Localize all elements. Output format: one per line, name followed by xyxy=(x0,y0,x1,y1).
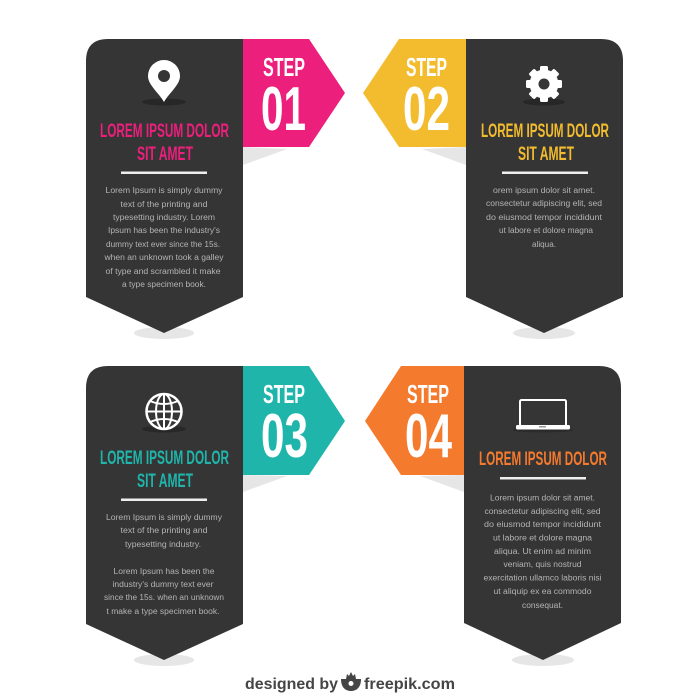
body text 4: Lorem ipsum dolor sit amet. xyxy=(490,494,595,502)
divider 2 xyxy=(502,172,588,174)
body text 1: dummy text ever since the 15s. xyxy=(106,240,220,249)
heading 1 xyxy=(100,121,229,165)
body text 4 xyxy=(484,494,602,610)
body text 4: aliqua. Ut enim ad minim xyxy=(494,547,591,556)
step label 1: STEP xyxy=(263,52,305,82)
body text 3: typesetting industry. xyxy=(125,540,201,549)
icon: laptop xyxy=(513,400,573,432)
body text 4: ut labore et dolore magna xyxy=(493,534,593,542)
tab shadow 2 xyxy=(422,147,466,165)
body text 1: a type specimen book. xyxy=(122,280,206,289)
tab shadow 3 xyxy=(243,475,287,492)
yellow arrow tab xyxy=(363,39,466,147)
body text 1: typesetting industry. Lorem xyxy=(113,213,215,222)
body text 1: text of the printing and xyxy=(120,200,208,209)
heading 1: SIT AMET xyxy=(137,144,193,165)
footer credit xyxy=(245,672,455,693)
heading 2: LOREM IPSUM DOLOR xyxy=(481,121,609,142)
divider 3 xyxy=(121,498,207,501)
step number 01: 01 xyxy=(261,75,306,144)
floor shadow under panel 3 xyxy=(134,654,194,666)
footer credit: designed by xyxy=(245,676,338,693)
body text 4: ut aliquip ex ea commodo xyxy=(494,587,592,596)
divider 1 xyxy=(121,172,207,174)
tab shadow 1 xyxy=(243,147,287,165)
teal arrow tab xyxy=(243,366,345,475)
heading 3: SIT AMET xyxy=(137,471,193,492)
step label 3: STEP xyxy=(263,379,305,409)
body text 2: do eiusmod tempor incididunt xyxy=(486,213,603,222)
heading 2: SIT AMET xyxy=(518,144,574,165)
body text 4: do eiusmod tempor incididunt xyxy=(484,520,602,529)
heading 1: LOREM IPSUM DOLOR xyxy=(100,121,229,142)
step number 04: 04 xyxy=(405,402,452,471)
body text 3: Lorem Ipsum is simply dummy xyxy=(106,513,222,522)
panel: step 01 xyxy=(86,39,345,339)
body text 3: since the 15s. when an unknown xyxy=(104,593,224,602)
body text 4: veniam, quis nostrud xyxy=(504,560,582,569)
icon: freepik logo xyxy=(341,672,361,691)
heading 3 xyxy=(100,448,229,492)
heading 2 xyxy=(481,121,609,165)
body text 1: of type and scrambled it make xyxy=(106,267,221,276)
body text 2: ut labore et dolore magna xyxy=(499,226,594,235)
floor shadow under panel 2 xyxy=(513,327,575,339)
body text 3: t make a type specimen book. xyxy=(106,607,220,616)
divider 4 xyxy=(500,477,586,480)
dark card 3 xyxy=(86,366,243,660)
dark card 2 xyxy=(466,39,623,333)
body text 2: consectetur adipiscing elit, sed xyxy=(486,199,602,208)
orange arrow tab xyxy=(365,366,464,475)
step label 2: STEP xyxy=(406,52,447,82)
step number 02: 02 xyxy=(403,75,450,144)
body text 2: aliqua. xyxy=(532,240,556,249)
icon: location pin xyxy=(142,60,186,106)
pink arrow tab xyxy=(243,39,345,147)
body text 2: orem ipsum dolor sit amet. xyxy=(493,186,595,195)
dark card 1 xyxy=(86,39,243,333)
body text 4: consequat. xyxy=(522,601,563,610)
panel: step 02 xyxy=(363,39,623,339)
floor shadow under panel 1 xyxy=(134,327,194,339)
body text 3 xyxy=(104,513,224,616)
panel: step 04 xyxy=(365,366,621,666)
step number 03: 03 xyxy=(261,402,308,471)
heading 3: LOREM IPSUM DOLOR xyxy=(100,448,229,469)
body text 3: industry's dummy text ever xyxy=(112,580,214,589)
tab shadow 4 xyxy=(420,475,464,492)
heading 4: LOREM IPSUM DOLOR xyxy=(479,449,607,470)
body text 3: text of the printing and xyxy=(120,526,208,535)
body text 4: exercitation ullamco laboris nisi xyxy=(484,574,602,582)
body text 1: Ipsum has been the industry's xyxy=(108,226,220,235)
icon: globe xyxy=(142,394,186,432)
dark card 4 xyxy=(464,366,621,660)
body text 1: Lorem Ipsum is simply dummy xyxy=(106,186,222,195)
icon: gear xyxy=(523,66,565,106)
step label 4: STEP xyxy=(407,379,449,409)
body text 4: consectetur adipiscing elit, sed xyxy=(484,507,600,516)
body text 1 xyxy=(103,186,224,289)
body text 1: when an unknown took a galley xyxy=(103,253,224,262)
panel: step 03 xyxy=(86,366,345,666)
footer credit: freepik.com xyxy=(364,676,455,693)
body text 3: Lorem Ipsum has been the xyxy=(114,567,215,576)
floor shadow under panel 4 xyxy=(512,654,574,666)
body text 2 xyxy=(486,186,603,249)
